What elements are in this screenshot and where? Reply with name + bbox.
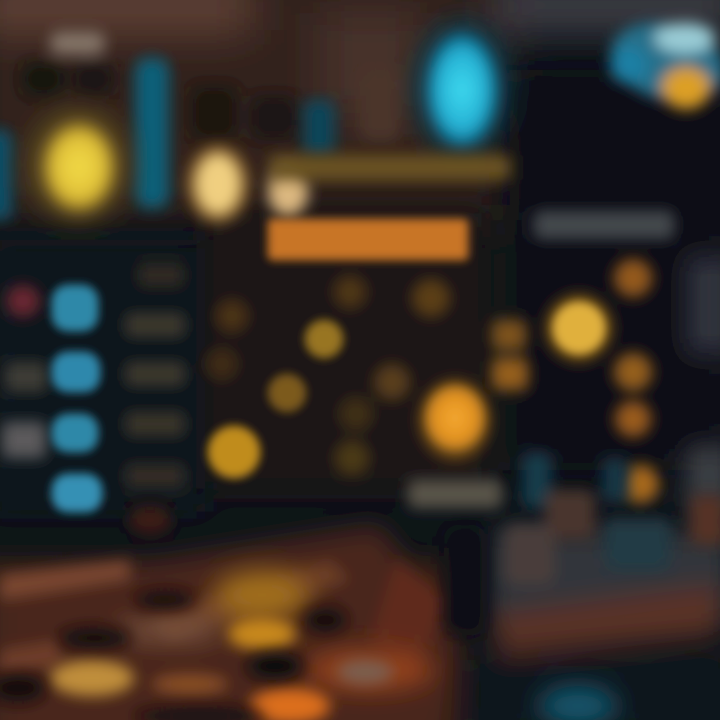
table dark spots: [0, 506, 347, 720]
icon: pale lanterns: [186, 144, 308, 224]
icon: blue buttons: [52, 285, 102, 512]
icon: blue glow bottom: [538, 686, 618, 720]
icon: teal tall lamps: [0, 58, 335, 220]
panel: top wall: [0, 0, 720, 220]
heading: orange title bar: [268, 219, 468, 260]
text block: left grey labels: [2, 362, 47, 458]
icon: dark bottle: [444, 525, 486, 635]
icon: cyan lantern: [416, 22, 508, 154]
text block: column labels: [125, 263, 185, 488]
icon: yellow lantern: [28, 109, 128, 221]
icon: large amber bulb: [419, 380, 491, 460]
panel: left status column: [2, 263, 185, 512]
text block: right grey label: [534, 211, 674, 239]
panel: bottom table: [0, 525, 720, 720]
panel: central dark board: [0, 70, 720, 510]
lower right objects: [505, 452, 720, 585]
text block: base plate under bulb: [408, 480, 502, 508]
chart: scattered glowing nodes: [205, 275, 450, 478]
panel: table highlights: [0, 506, 435, 720]
panel: right edge grey panel: [686, 255, 720, 510]
icon: large yellow node: [545, 294, 613, 362]
heading: upper title bar: [270, 155, 510, 180]
top dark fixtures: [22, 32, 400, 140]
chart: orange stacked blocks: [492, 320, 528, 390]
table streaks: [0, 560, 450, 680]
icon: planet badge top right: [602, 10, 720, 114]
chart: right column nodes: [614, 259, 659, 503]
icon: red status dot: [6, 285, 40, 317]
